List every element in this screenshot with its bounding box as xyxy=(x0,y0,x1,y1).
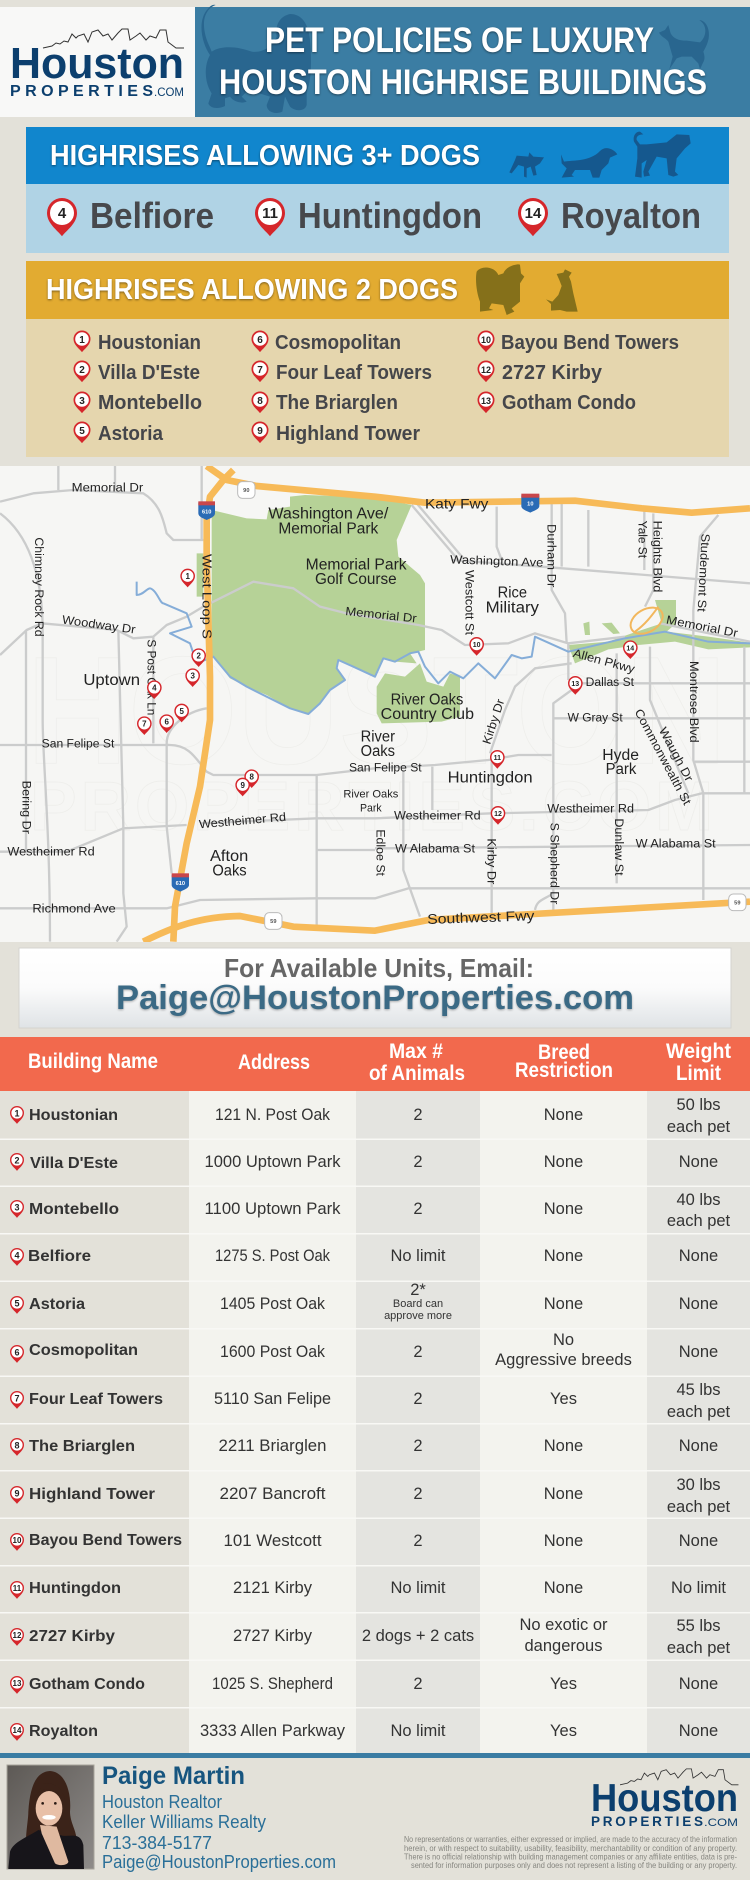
row 5 Astoria: None xyxy=(679,1295,718,1313)
map pin 5 xyxy=(174,704,189,722)
row 13 Gotham Condo: 2 xyxy=(413,1675,423,1693)
US 59 west: 59 xyxy=(270,919,276,925)
row 4 Belfiore: 1275 S. Post Oak xyxy=(215,1247,331,1265)
row 3 Montebello: Montebello xyxy=(29,1201,119,1218)
row 11 Huntingdon: No limit xyxy=(671,1579,726,1597)
row 7 Four Leaf Towers: Four Leaf Towers xyxy=(29,1391,163,1408)
map labels: Richmond Ave xyxy=(32,901,116,915)
row 1 Houstonian: 2 xyxy=(413,1106,423,1124)
heading: 3+ dogs: HIGHRISES ALLOWING 3+ DOGS xyxy=(50,140,480,172)
map labels: San Felipe St xyxy=(349,761,422,775)
map pins xyxy=(137,569,638,825)
US 59 east: 59 xyxy=(734,900,740,906)
map pin 14: 14 xyxy=(626,645,634,652)
row 8 The Briarglen: 2 xyxy=(413,1437,423,1455)
map labels: Waugh Dr xyxy=(656,725,696,784)
row 8 The Briarglen xyxy=(10,1437,718,1456)
map pin 8 xyxy=(244,769,259,788)
row 5 Astoria: None xyxy=(544,1295,583,1313)
row 9 Highland Tower xyxy=(10,1476,731,1516)
map labels: Bering Dr xyxy=(20,781,34,834)
item 3 Montebello: Montebello xyxy=(98,392,202,414)
row 10 Bayou Bend Towers: None xyxy=(544,1532,583,1550)
item 8 The Briarglen: 8 xyxy=(257,396,263,407)
map labels: Westcott St xyxy=(463,570,477,636)
row 4 Belfiore: Belfiore xyxy=(28,1248,91,1265)
map labels: Edloe St xyxy=(374,829,388,877)
row 1 Houstonian: 50 lbs xyxy=(676,1096,721,1114)
map pin 1 xyxy=(180,569,195,587)
row 14 Royalton: None xyxy=(679,1722,718,1740)
item 2 Villa D'Este: Villa D'Este xyxy=(98,362,200,384)
column: weight limit xyxy=(666,1040,731,1085)
map labels: Montrose Blvd xyxy=(687,661,701,743)
map pin 1: 1 xyxy=(185,572,190,581)
row 7 Four Leaf Towers: 7 xyxy=(14,1394,20,1404)
row 10 Bayou Bend Towers: Bayou Bend Towers xyxy=(29,1532,182,1549)
map labels: Studemont St xyxy=(695,533,713,613)
map labels: W Gray St xyxy=(568,711,623,725)
highway shields xyxy=(172,482,746,929)
US 59 east xyxy=(729,894,746,911)
icon: large dog silhouette xyxy=(201,5,311,113)
I-610 north xyxy=(198,501,215,520)
map labels: Oaks xyxy=(361,743,395,760)
icon: fluffy dog xyxy=(476,264,524,315)
row 13 Gotham Condo xyxy=(10,1675,718,1694)
row 7 Four Leaf Towers: Yes xyxy=(550,1390,577,1408)
row 8 The Briarglen: None xyxy=(679,1437,718,1455)
map of highrise locations xyxy=(0,466,750,942)
row 4 Belfiore: 4 xyxy=(14,1250,20,1260)
map labels: Hyde xyxy=(602,747,639,764)
column: breed restriction: Restriction xyxy=(515,1059,613,1082)
map labels: River xyxy=(361,729,395,746)
item 8 The Briarglen: The Briarglen xyxy=(276,392,398,414)
I-10: 10 xyxy=(527,502,533,508)
row 6 Cosmopolitan: Cosmopolitan xyxy=(29,1342,138,1359)
footer logo: PROPERTIES xyxy=(591,1814,703,1829)
item 2 Villa D'Este: 2 xyxy=(79,365,85,376)
map pin 13: 13 xyxy=(571,681,579,688)
map pin 4 xyxy=(147,680,162,699)
agent phone: 713-384-5177 xyxy=(102,1833,212,1853)
map labels: Rice xyxy=(498,584,527,601)
row 7 Four Leaf Towers xyxy=(10,1381,731,1421)
map labels: Memorial Park xyxy=(278,520,379,537)
row 9 Highland Tower: 2207 Bancroft xyxy=(220,1485,326,1503)
map pin 3: 3 xyxy=(190,672,195,681)
map labels: Washington Ave/ xyxy=(268,505,389,522)
column: breed restriction xyxy=(515,1041,613,1082)
row 10 Bayou Bend Towers: None xyxy=(679,1532,718,1550)
US 90: 90 xyxy=(243,488,249,494)
row 1 Houstonian: each pet xyxy=(667,1118,731,1136)
row 5 Astoria: 2* xyxy=(410,1281,426,1299)
row 14 Royalton: 14 xyxy=(13,1726,22,1735)
item 5 Astoria xyxy=(74,422,164,445)
watermark xyxy=(34,656,718,830)
row 5 Astoria: 1405 Post Oak xyxy=(220,1295,326,1313)
row 11 Huntingdon xyxy=(10,1579,726,1599)
map pin 10: 10 xyxy=(473,642,481,649)
row 6 Cosmopolitan: 6 xyxy=(14,1348,20,1358)
row 2 Villa D'Este: 2 xyxy=(413,1153,423,1171)
row 3 Montebello: each pet xyxy=(667,1212,731,1230)
map labels: Chimney Rock Rd xyxy=(32,537,46,637)
row 6 Cosmopolitan xyxy=(10,1331,718,1369)
footer logo: Houston xyxy=(591,1777,738,1820)
map pin 14 xyxy=(623,640,638,659)
map labels: Allen Pkwy xyxy=(572,646,636,676)
map labels: Oaks xyxy=(212,863,247,880)
map labels: W Alabama St xyxy=(636,837,716,851)
item 12 2727 Kirby: 12 xyxy=(481,365,491,375)
heading: 2 dogs: HIGHRISES ALLOWING 2 DOGS xyxy=(46,274,458,306)
icon: small dog xyxy=(509,152,544,178)
row 4 Belfiore xyxy=(10,1247,718,1266)
item 10 Bayou Bend Towers: Bayou Bend Towers xyxy=(501,332,679,354)
row 11 Huntingdon: Huntingdon xyxy=(29,1580,121,1597)
watermark: PROPERTIES.COM xyxy=(30,767,713,845)
row 7 Four Leaf Towers: each pet xyxy=(667,1403,731,1421)
column: max animals: Max # xyxy=(389,1040,443,1063)
interchange xyxy=(630,606,664,635)
row 11 Huntingdon: 11 xyxy=(13,1584,22,1593)
row 12 2727 Kirby: 12 xyxy=(13,1631,22,1640)
item 10 Bayou Bend Towers: 10 xyxy=(481,335,491,345)
row 9 Highland Tower: 2 xyxy=(413,1485,423,1503)
map pin 9 xyxy=(235,778,250,796)
item 6 Cosmopolitan: Cosmopolitan xyxy=(275,332,401,354)
row 7 Four Leaf Towers: 2 xyxy=(413,1390,423,1408)
map pin 3 xyxy=(185,668,200,687)
row 6 Cosmopolitan: Aggressive breeds xyxy=(495,1351,632,1369)
building: Belfiore: Belfiore xyxy=(90,195,214,236)
map labels: W Alabama St xyxy=(395,842,476,856)
row 12 2727 Kirby: 2727 Kirby xyxy=(233,1627,313,1645)
map labels: Southwest Fwy xyxy=(427,907,535,927)
row 9 Highland Tower: 30 lbs xyxy=(676,1476,721,1494)
map labels: Memorial Park xyxy=(306,556,407,573)
row 10 Bayou Bend Towers xyxy=(10,1532,718,1551)
column: building name: Building Name xyxy=(28,1050,158,1073)
column: address: Address xyxy=(238,1051,310,1074)
row 5 Astoria: 5 xyxy=(14,1298,20,1308)
map pin 2 xyxy=(191,648,206,667)
row 2 Villa D'Este: 2 xyxy=(14,1156,20,1166)
row 13 Gotham Condo: Gotham Condo xyxy=(29,1676,145,1693)
item 9 Highland Tower: 9 xyxy=(257,426,263,437)
pin 4 xyxy=(47,198,77,236)
icon: tall dog xyxy=(634,132,691,178)
map pin 6: 6 xyxy=(164,718,169,727)
pin 4: 4 xyxy=(58,205,67,222)
row 12 2727 Kirby: 55 lbs xyxy=(676,1617,721,1635)
map labels: S Post Oak Ln xyxy=(144,639,158,715)
row 4 Belfiore: None xyxy=(544,1247,583,1265)
map pin 7 xyxy=(137,716,152,735)
item 1 Houstonian: Houstonian xyxy=(98,332,201,354)
row 9 Highland Tower: None xyxy=(544,1485,583,1503)
row 14 Royalton: Royalton xyxy=(29,1723,98,1740)
pin 11 xyxy=(255,198,285,236)
map labels: Westheimer Rd xyxy=(547,802,634,816)
agent contact details xyxy=(102,1762,336,1872)
title line 1: PET POLICIES OF LUXURY xyxy=(265,21,654,60)
email prompt: For Available Units, Email: xyxy=(224,953,534,983)
item 1 Houstonian: 1 xyxy=(79,335,85,346)
row 6 Cosmopolitan: No xyxy=(553,1331,574,1349)
map labels: San Felipe St xyxy=(42,736,115,750)
map pin 2: 2 xyxy=(196,652,201,661)
icon: dachshund xyxy=(561,148,617,178)
row 3 Montebello xyxy=(10,1191,731,1230)
map labels: Durham Dr xyxy=(544,524,558,587)
map labels: Westheimer Rd xyxy=(394,808,481,822)
freeways xyxy=(143,466,750,942)
map labels: Heights Blvd xyxy=(650,521,664,592)
map labels: Country Club xyxy=(381,706,474,723)
map pin 5: 5 xyxy=(179,707,184,716)
row 10 Bayou Bend Towers: 10 xyxy=(13,1536,22,1545)
row 12 2727 Kirby xyxy=(10,1616,731,1657)
row 8 The Briarglen: 8 xyxy=(14,1440,20,1450)
map pin 12 xyxy=(491,806,505,825)
row 1 Houstonian: 121 N. Post Oak xyxy=(215,1106,331,1124)
map labels: Commonwealth St xyxy=(632,706,694,808)
parks xyxy=(197,495,750,723)
pin 11: 11 xyxy=(262,205,278,222)
list: column 1 xyxy=(74,330,202,445)
map pin 11: 11 xyxy=(494,755,501,762)
item 7 Four Leaf Towers: Four Leaf Towers xyxy=(276,362,432,384)
row 3 Montebello: None xyxy=(544,1200,583,1218)
row 5 Astoria: Board can xyxy=(393,1298,443,1310)
map labels: Woodway Dr xyxy=(61,612,136,637)
I-610 north: 610 xyxy=(202,509,211,515)
column shading xyxy=(189,1091,750,1753)
header logo panel xyxy=(0,7,195,117)
row 8 The Briarglen: None xyxy=(544,1437,583,1455)
row 1 Houstonian: None xyxy=(544,1106,583,1124)
logo wordmark Properties: .COM xyxy=(154,85,184,99)
I-610 south xyxy=(172,873,189,892)
row 4 Belfiore: No limit xyxy=(390,1247,446,1265)
map pin 12: 12 xyxy=(494,811,502,818)
email address: Paige@HoustonProperties.com xyxy=(116,979,634,1017)
row 3 Montebello: 2 xyxy=(413,1200,423,1218)
row 4 Belfiore: None xyxy=(679,1247,718,1265)
map labels: Dunlaw St xyxy=(612,818,626,876)
item 13 Gotham Condo: 13 xyxy=(481,396,491,406)
table body xyxy=(0,1091,750,1753)
river xyxy=(137,582,750,714)
map labels xyxy=(7,481,739,927)
row 3 Montebello: 40 lbs xyxy=(676,1191,721,1209)
map labels: S Shepherd Dr xyxy=(548,823,562,904)
map pin 10 xyxy=(469,637,484,656)
panel: highrises allowing 2 dogs xyxy=(26,261,729,457)
agent email: Paige@HoustonProperties.com xyxy=(102,1852,336,1872)
row 2 Villa D'Este: Villa D'Este xyxy=(30,1155,118,1172)
map pin 6 xyxy=(159,714,174,733)
row 14 Royalton xyxy=(10,1722,718,1741)
map labels: Katy Fwy xyxy=(425,495,488,511)
item 7 Four Leaf Towers: 7 xyxy=(257,365,263,376)
row 5 Astoria: approve more xyxy=(384,1310,452,1322)
map labels: Memorial Dr xyxy=(345,604,417,625)
map labels: Military xyxy=(486,599,539,616)
row 13 Gotham Condo: 13 xyxy=(13,1679,22,1688)
logo wordmark Properties: PROPERTIES xyxy=(10,83,153,100)
item 5 Astoria: 5 xyxy=(79,426,85,437)
item 6 Cosmopolitan: 6 xyxy=(257,335,263,346)
map labels: West Loop S xyxy=(199,554,214,639)
map labels: Memorial Dr xyxy=(72,481,143,495)
column: weight limit: Limit xyxy=(676,1062,721,1085)
list: column 2 xyxy=(252,330,432,445)
map labels: Kirby Dr xyxy=(480,697,507,746)
agent name: Paige Martin xyxy=(102,1762,245,1790)
header title banner xyxy=(195,5,750,117)
map labels: Memorial Dr xyxy=(665,613,739,640)
map pin 9: 9 xyxy=(240,781,245,790)
row 2 Villa D'Este xyxy=(10,1153,718,1172)
map labels: Westheimer Rd xyxy=(7,845,95,859)
row 14 Royalton: No limit xyxy=(390,1722,446,1740)
US 59 west xyxy=(265,913,282,929)
row 13 Gotham Condo: Yes xyxy=(550,1675,577,1693)
row 9 Highland Tower: each pet xyxy=(667,1498,731,1516)
row 8 The Briarglen: 2211 Briarglen xyxy=(218,1437,326,1455)
map labels: Kirby Dr xyxy=(484,838,498,884)
row 13 Gotham Condo: None xyxy=(679,1675,718,1693)
agent role: Houston Realtor xyxy=(102,1792,222,1812)
footer logo: .COM xyxy=(704,1817,738,1829)
pin 14 xyxy=(518,198,548,236)
row 5 Astoria xyxy=(10,1281,718,1322)
row 2 Villa D'Este: None xyxy=(544,1153,583,1171)
map labels: Park xyxy=(606,761,637,778)
item 13 Gotham Condo: Gotham Condo xyxy=(502,392,636,414)
map labels: Huntingdon xyxy=(448,770,533,787)
I-610 south: 610 xyxy=(176,881,185,887)
row 8 The Briarglen: The Briarglen xyxy=(29,1438,135,1455)
map labels: Uptown xyxy=(83,672,140,689)
row 6 Cosmopolitan: 2 xyxy=(413,1343,423,1361)
email callout xyxy=(19,948,731,1028)
road network xyxy=(0,466,750,942)
list: column 3 xyxy=(478,330,679,414)
row 3 Montebello: 3 xyxy=(14,1202,20,1212)
row 13 Gotham Condo: 1025 S. Shepherd xyxy=(212,1675,333,1693)
map pin 11 xyxy=(490,750,505,769)
column: weight limit: Weight xyxy=(666,1040,731,1063)
row 11 Huntingdon: 2121 Kirby xyxy=(233,1579,313,1597)
map pin 13 xyxy=(568,676,583,695)
row 1 Houstonian xyxy=(10,1096,731,1136)
map pin 4: 4 xyxy=(152,684,157,693)
footer divider bar xyxy=(0,1753,750,1758)
map labels: Park xyxy=(360,803,382,815)
icon: cat silhouette xyxy=(659,20,709,69)
row 12 2727 Kirby: each pet xyxy=(667,1639,731,1657)
building: Royalton: Royalton xyxy=(561,195,701,236)
row 9 Highland Tower: Highland Tower xyxy=(29,1486,155,1503)
row 12 2727 Kirby: dangerous xyxy=(525,1637,602,1655)
row 1 Houstonian: 1 xyxy=(14,1108,20,1118)
disclaimer text xyxy=(404,1834,737,1870)
agent brokerage: Keller Williams Realty xyxy=(102,1812,266,1832)
row 3 Montebello: 1100 Uptown Park xyxy=(204,1200,341,1218)
row 14 Royalton: Yes xyxy=(550,1722,577,1740)
row 14 Royalton: 3333 Allen Parkway xyxy=(200,1722,346,1740)
item 3 Montebello: 3 xyxy=(79,396,85,407)
map labels: Afton xyxy=(210,848,248,865)
row 11 Huntingdon: No limit xyxy=(390,1579,446,1597)
icon: small sitting dog xyxy=(546,269,578,312)
row 7 Four Leaf Towers: 45 lbs xyxy=(676,1381,721,1399)
row 6 Cosmopolitan: None xyxy=(679,1343,718,1361)
map labels: Dallas St xyxy=(586,675,635,689)
map labels: River Oaks xyxy=(391,691,464,708)
column: breed restriction: Breed xyxy=(538,1041,590,1064)
row 9 Highland Tower: 9 xyxy=(14,1488,20,1498)
logo wordmark Houston: Houston xyxy=(10,39,184,88)
row 7 Four Leaf Towers: 5110 San Felipe xyxy=(214,1390,331,1408)
row 12 2727 Kirby: 2 dogs + 2 cats xyxy=(362,1627,474,1645)
footer logo xyxy=(591,1769,738,1829)
agent photo xyxy=(7,1765,94,1869)
row 12 2727 Kirby: No exotic or xyxy=(519,1616,608,1634)
map labels: Washington Ave xyxy=(450,552,544,570)
I-10 xyxy=(521,494,539,513)
map pin 7: 7 xyxy=(142,720,147,729)
map labels: Golf Course xyxy=(315,571,397,588)
row 2 Villa D'Este: None xyxy=(679,1153,718,1171)
pin 14: 14 xyxy=(525,205,542,222)
table header xyxy=(0,1037,750,1091)
row 5 Astoria: Astoria xyxy=(29,1296,85,1313)
row 1 Houstonian: Houstonian xyxy=(29,1107,118,1124)
row 11 Huntingdon: None xyxy=(544,1579,583,1597)
column: max animals xyxy=(369,1040,465,1085)
row 2 Villa D'Este: 1000 Uptown Park xyxy=(204,1153,341,1171)
building: Huntingdon: Huntingdon xyxy=(298,195,482,236)
item 12 2727 Kirby: 2727 Kirby xyxy=(502,362,603,384)
row 12 2727 Kirby: 2727 Kirby xyxy=(29,1628,115,1645)
row 10 Bayou Bend Towers: 101 Westcott xyxy=(224,1532,322,1550)
row 10 Bayou Bend Towers: 2 xyxy=(413,1532,423,1550)
item 5 Astoria: Astoria xyxy=(98,423,164,445)
map labels: River Oaks xyxy=(343,788,398,800)
US 90 xyxy=(238,482,255,498)
map labels: Westheimer Rd xyxy=(198,810,287,831)
item 9 Highland Tower: Highland Tower xyxy=(276,423,420,445)
map labels: Yale St xyxy=(635,521,649,559)
map pin 8: 8 xyxy=(249,773,254,782)
row 6 Cosmopolitan: 1600 Post Oak xyxy=(220,1343,326,1361)
column: max animals: of Animals xyxy=(369,1062,465,1085)
panel: highrises allowing 3+ dogs xyxy=(26,127,729,253)
